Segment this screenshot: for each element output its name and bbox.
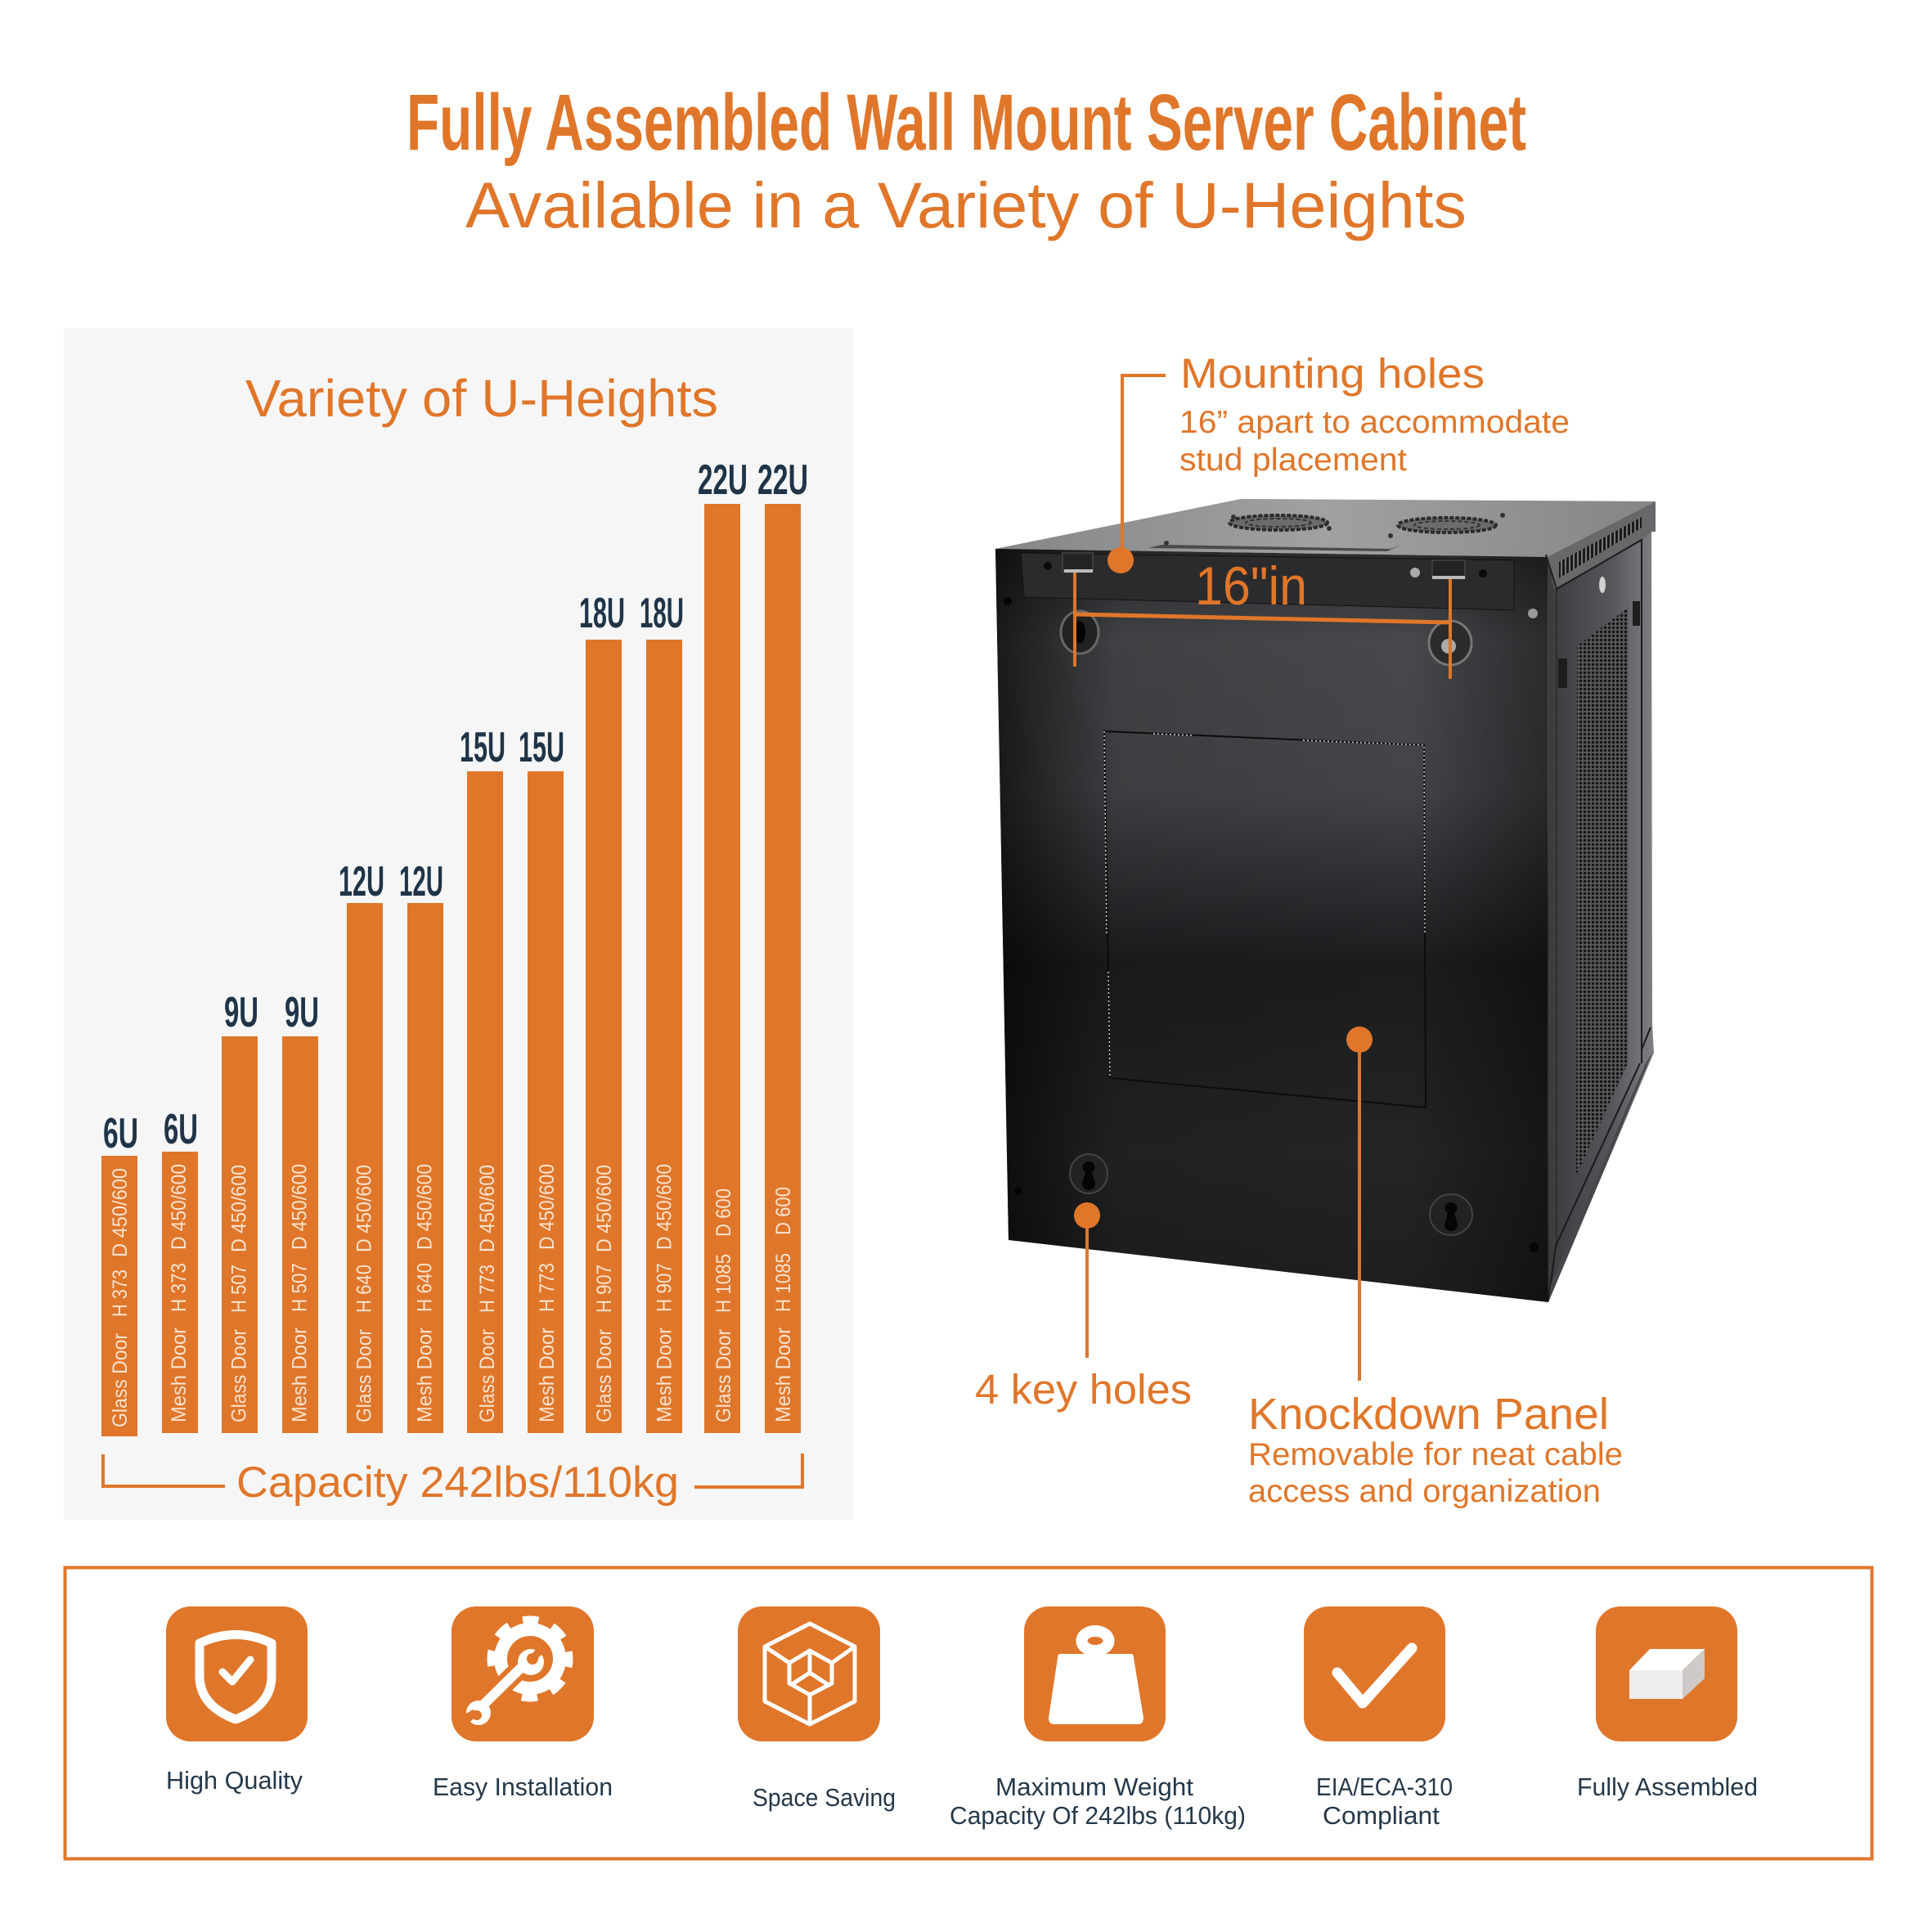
bar: 18U glass door: D 450/600 bbox=[593, 1165, 616, 1252]
icon: gear and wrench bbox=[452, 1606, 594, 1741]
bar: 22U glass door: D 600 bbox=[712, 1188, 735, 1237]
feature: space saving bbox=[738, 1606, 896, 1812]
bar: 9U mesh door: D 450/600 bbox=[288, 1164, 311, 1250]
bar: 15U mesh door: Mesh Door bbox=[536, 1328, 559, 1422]
bar: 18U glass door: 18U bbox=[579, 590, 625, 637]
bar: 15U glass door: 15U bbox=[460, 724, 505, 771]
bar: 6U glass door: D 450/600 bbox=[109, 1168, 132, 1257]
bar: 18U mesh door: D 450/600 bbox=[653, 1164, 676, 1250]
cabinet top face bbox=[995, 499, 1656, 557]
key holes bbox=[1061, 611, 1472, 1235]
bar: 22U mesh door bbox=[757, 456, 808, 1433]
dimension: 16 inch spacing bbox=[1075, 555, 1450, 679]
bar: 15U mesh door: 15U bbox=[519, 724, 564, 771]
dimension: 16 inch spacing: 16"in bbox=[1195, 555, 1307, 616]
feature: EIA/ECA-310 compliant: EIA/ECA-310 bbox=[1316, 1772, 1453, 1801]
bar: 9U glass door: Glass Door bbox=[227, 1329, 250, 1422]
bar: 15U mesh door: D 450/600 bbox=[536, 1164, 559, 1250]
feature: maximum weight: Maximum Weight bbox=[995, 1772, 1193, 1801]
bar: 22U glass door: Glass Door bbox=[712, 1329, 735, 1422]
callout: mounting holes: stud placement bbox=[1179, 443, 1407, 478]
feature: high quality: High Quality bbox=[166, 1766, 303, 1795]
bar chart bbox=[101, 456, 808, 1436]
bar: 6U mesh door: D 450/600 bbox=[168, 1164, 191, 1250]
icon: cube bbox=[738, 1606, 880, 1741]
feature: EIA/ECA-310 compliant bbox=[1304, 1606, 1453, 1830]
callout: knockdown panel bbox=[1248, 1027, 1623, 1509]
bar: 9U glass door: D 450/600 bbox=[227, 1165, 250, 1252]
bar: 18U glass door: H 907 bbox=[593, 1265, 616, 1313]
icon: weight bbox=[1024, 1606, 1166, 1741]
bar: 15U glass door: H 773 bbox=[476, 1265, 499, 1313]
bar: 22U glass door: H 1085 bbox=[712, 1254, 735, 1313]
capacity bracket bbox=[103, 1453, 802, 1507]
bar: 12U mesh door: 12U bbox=[399, 858, 443, 905]
feature: high quality bbox=[166, 1606, 308, 1795]
bar: 12U glass door: H 640 bbox=[353, 1265, 376, 1313]
title: Available in a Variety of U-Heights bbox=[465, 168, 1467, 241]
cabinet side face bbox=[1546, 501, 1656, 1302]
mounting bracket bbox=[1021, 553, 1514, 610]
panel: features bbox=[65, 1567, 1871, 1858]
bar: 15U glass door: Glass Door bbox=[476, 1329, 499, 1422]
callout: mounting holes: Mounting holes bbox=[1180, 350, 1485, 397]
product photo: cabinet bbox=[995, 499, 1656, 1302]
feature: EIA/ECA-310 compliant: Compliant bbox=[1323, 1801, 1440, 1830]
icon: shield bbox=[166, 1606, 308, 1741]
bar: 6U mesh door bbox=[162, 1106, 198, 1433]
callout: 4 key holes bbox=[975, 1202, 1192, 1413]
bar: 22U glass door bbox=[698, 456, 748, 1433]
bar: 12U mesh door: H 640 bbox=[414, 1263, 437, 1312]
icon: box bbox=[1596, 1606, 1737, 1741]
bar: 6U mesh door: Mesh Door bbox=[168, 1328, 191, 1422]
bar: 15U glass door bbox=[460, 724, 505, 1433]
bar: 22U mesh door: 22U bbox=[757, 456, 808, 504]
feature: fully assembled bbox=[1577, 1606, 1758, 1801]
knockdown panel outline bbox=[1104, 731, 1426, 1108]
bar: 18U glass door: Glass Door bbox=[593, 1329, 616, 1422]
callout: knockdown panel: Knockdown Panel bbox=[1248, 1390, 1609, 1439]
feature: maximum weight: Capacity Of 242lbs (110kg) bbox=[950, 1801, 1246, 1830]
cabinet front face bbox=[995, 549, 1548, 1302]
bar: 12U mesh door: Mesh Door bbox=[414, 1328, 437, 1422]
bar: 6U glass door: Glass Door bbox=[109, 1333, 132, 1427]
bar: 6U mesh door: H 373 bbox=[168, 1263, 191, 1312]
callout: mounting holes bbox=[1108, 350, 1570, 573]
bar: 6U glass door bbox=[101, 1110, 138, 1436]
bar: 9U mesh door: H 507 bbox=[288, 1263, 311, 1312]
bar: 6U glass door: H 373 bbox=[109, 1269, 132, 1317]
bar: 22U mesh door: Mesh Door bbox=[772, 1328, 795, 1422]
bar: 18U mesh door: 18U bbox=[640, 590, 684, 637]
bar: 15U mesh door bbox=[519, 724, 564, 1433]
feature: easy installation bbox=[433, 1606, 613, 1801]
bar: 9U mesh door: 9U bbox=[285, 989, 319, 1036]
bar: 12U mesh door: D 450/600 bbox=[414, 1164, 437, 1250]
capacity bracket: Capacity 242lbs/110kg bbox=[236, 1458, 679, 1507]
bar: 6U glass door: 6U bbox=[103, 1110, 138, 1157]
bar: 22U mesh door: H 1085 bbox=[772, 1253, 795, 1312]
bar: 18U mesh door bbox=[640, 590, 684, 1433]
bar: 6U mesh door: 6U bbox=[164, 1106, 198, 1153]
bar: 9U mesh door bbox=[282, 989, 319, 1433]
feature: easy installation: Easy Installation bbox=[433, 1772, 613, 1801]
icon: check mark bbox=[1304, 1606, 1445, 1741]
feature: maximum weight bbox=[950, 1606, 1246, 1830]
screws bbox=[1004, 597, 1539, 1252]
bar: 15U mesh door: H 773 bbox=[536, 1263, 559, 1312]
bar: 18U glass door bbox=[579, 590, 625, 1433]
bar: 18U mesh door: Mesh Door bbox=[653, 1328, 676, 1422]
bar: 12U glass door: 12U bbox=[339, 858, 384, 905]
panel heading: Variety of U-Heights bbox=[245, 369, 718, 428]
bar: 12U glass door: Glass Door bbox=[353, 1329, 376, 1422]
bar: 22U glass door: 22U bbox=[698, 456, 748, 504]
bar: 15U glass door: D 450/600 bbox=[476, 1165, 499, 1252]
bar: 12U glass door bbox=[339, 858, 384, 1433]
callout: mounting holes: 16” apart to accommodate bbox=[1179, 405, 1570, 440]
feature: space saving: Space Saving bbox=[753, 1783, 896, 1812]
bar: 12U glass door: D 450/600 bbox=[353, 1165, 376, 1252]
bar: 12U mesh door bbox=[399, 858, 443, 1433]
bar: 9U glass door: H 507 bbox=[227, 1265, 250, 1313]
callout: knockdown panel: Removable for neat cable bbox=[1248, 1437, 1623, 1472]
bar: 18U mesh door: H 907 bbox=[653, 1263, 676, 1312]
bar: 9U mesh door: Mesh Door bbox=[288, 1328, 311, 1422]
feature: fully assembled: Fully Assembled bbox=[1577, 1772, 1758, 1801]
panel: variety of U-heights bbox=[64, 328, 854, 1520]
bar: 9U glass door: 9U bbox=[224, 989, 258, 1036]
callout: 4 key holes: 4 key holes bbox=[975, 1366, 1192, 1413]
bar: 9U glass door bbox=[222, 989, 258, 1433]
title bbox=[407, 78, 1526, 241]
callout: knockdown panel: access and organization bbox=[1248, 1474, 1601, 1509]
bar: 22U mesh door: D 600 bbox=[772, 1187, 795, 1235]
